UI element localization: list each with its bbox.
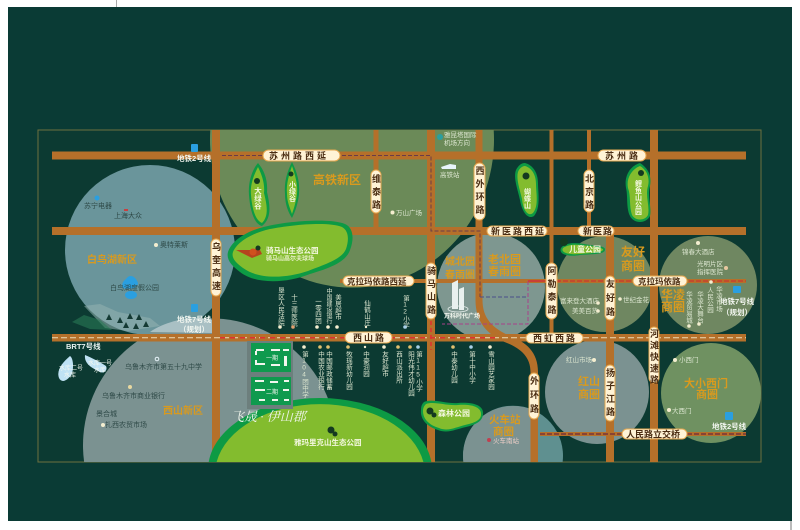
metro icon: 地铁2号线 north: 地铁2号线 bbox=[177, 153, 212, 163]
points of interest: east districts bbox=[487, 241, 728, 445]
lakes: BRT lake right: 水库一号 bbox=[88, 359, 112, 367]
name: 城北商圈 right: 老北园 bbox=[488, 252, 521, 266]
poi: 中国农业银行: 中国农业银行 bbox=[316, 350, 325, 391]
metro icon: 地铁7号线 east: 地铁7号线 bbox=[720, 296, 755, 306]
poi: 中国邮政储蓄: 中国邮政储蓄 bbox=[324, 350, 333, 391]
metro icon: 地铁7号线 west bbox=[177, 304, 212, 334]
poi: 光明路医院 bbox=[697, 259, 728, 276]
lakes: BRT lake left: 水库二号 bbox=[59, 364, 83, 372]
poi: 华凌贸易城: 华凌贸易城 bbox=[684, 290, 693, 325]
project block: 二期: 二期 bbox=[266, 388, 278, 396]
poi: 垦区人民法院: 垦区人民法院 bbox=[276, 287, 285, 327]
poi: 中泰幼儿园 bbox=[450, 345, 458, 385]
poi: 第115小学: 第115小学 bbox=[414, 350, 423, 392]
green park: 森林公园 bbox=[421, 401, 483, 432]
road label: 克拉玛依路: 克拉玛依路 bbox=[638, 276, 681, 286]
road label pills bbox=[211, 150, 687, 440]
project block: 一期: 一期 bbox=[266, 354, 278, 362]
name: 华凌商圈 bbox=[661, 287, 685, 314]
poi: 一零四团: 一零四团 bbox=[314, 298, 322, 325]
points of interest: along 西山路 north bbox=[276, 287, 410, 329]
green park: 蝴蝶山 bbox=[515, 163, 539, 217]
road label: 苏州路西延: 苏州路西延 bbox=[269, 150, 329, 161]
green park: 雅玛里克山生态公园 bbox=[209, 398, 431, 462]
poi: 锦春大酒店: 锦春大酒店 bbox=[682, 247, 715, 256]
road label: 西外环路: 西外环路 bbox=[474, 166, 484, 218]
poi group: 白鸟湖新区: 苏宁电器 bbox=[84, 201, 112, 210]
green park: 儿童公园 bbox=[560, 238, 605, 256]
poi: 世纪金花 bbox=[618, 295, 650, 304]
name: 高铁新区: 高铁新区 bbox=[313, 172, 361, 187]
poi group: 高铁新区: 高铁站 bbox=[440, 170, 460, 179]
green park: 鲤鱼山公园 bbox=[626, 163, 651, 222]
road label: 苏州路: 苏州路 bbox=[605, 150, 641, 161]
poi group: 高铁新区 bbox=[390, 130, 477, 217]
green park: 雅玛里克山生态公园: 雅玛里克山生态公园 bbox=[294, 437, 362, 447]
poi: 光明路医院: 光明片区 bbox=[697, 259, 724, 268]
metro icon: 地铁2号线 southeast: 地铁2号线 bbox=[712, 421, 747, 431]
poi: 友好超市 bbox=[380, 345, 389, 378]
road label: 维泰路: 维泰路 bbox=[371, 173, 381, 213]
poi group: 白鸟湖新区: 奥特莱斯 bbox=[160, 240, 188, 249]
road label: 骑马山路: 骑马山路 bbox=[426, 265, 436, 318]
metro icon: 地铁7号线 east bbox=[720, 286, 755, 317]
poi: 大西门: 大西门 bbox=[672, 406, 692, 415]
lakes: BRT lake right bbox=[85, 355, 112, 374]
metro icon: 地铁7号线 east: （规划） bbox=[722, 307, 752, 317]
poi: 西山派出所: 西山派出所 bbox=[394, 351, 403, 385]
poi: 世纪金花: 世纪金花 bbox=[623, 295, 650, 304]
area: 高铁新区 bbox=[210, 130, 494, 288]
green park: 鲤鱼山公园: 鲤鱼山公园 bbox=[634, 179, 642, 216]
poi: 中豪润园: 中豪润园 bbox=[362, 350, 370, 378]
lakes: BRT lake left bbox=[58, 356, 83, 381]
name: 城北商圈 right: 春雨圈 bbox=[488, 264, 521, 278]
green park: 小绿谷: 小绿谷 bbox=[288, 180, 296, 203]
poi: 牧瑶新幼儿园: 牧瑶新幼儿园 bbox=[344, 350, 353, 391]
road label: 外环路: 外环路 bbox=[529, 375, 539, 418]
name: 城北商圈 left: 城北园 bbox=[445, 255, 475, 268]
poi: 小西门: 小西门 bbox=[679, 355, 698, 364]
poi: 仙鹤山庄: 仙鹤山庄 bbox=[362, 299, 371, 327]
name: 华凌商圈: 华凌 bbox=[661, 287, 685, 302]
name: 红山商圈 bbox=[578, 374, 600, 401]
dashed routes bbox=[52, 156, 746, 434]
name: 城北商圈 left: 春雨圈 bbox=[445, 268, 475, 281]
road label: 阿勒泰路: 阿勒泰路 bbox=[546, 266, 556, 318]
poi: 第五十九中学: 乌鲁木齐市第五十九中学 bbox=[125, 362, 202, 371]
road label: 扬子江路: 扬子江路 bbox=[605, 367, 615, 420]
green park: 骑马山生态公园 bbox=[228, 221, 353, 281]
lakes: BRT lake right: 水库 bbox=[94, 366, 106, 374]
poi: 农贸市场: 扎西农贸市场 bbox=[105, 420, 147, 429]
BRT label: BRT7号线 bbox=[66, 341, 101, 351]
poi: 红山市场 bbox=[566, 355, 596, 364]
poi: 西山派出所 bbox=[394, 345, 403, 385]
points of interest: along 西山路 south bbox=[300, 345, 495, 398]
poi: 美居大酒店: 富来登大酒店 bbox=[560, 296, 600, 305]
district areas bbox=[65, 130, 761, 462]
poi: 火车南站 bbox=[487, 436, 520, 445]
road label: 河滩快速路: 河滩快速路 bbox=[649, 328, 659, 386]
forest and hills decoration bbox=[72, 304, 212, 333]
road label: 北京路: 北京路 bbox=[584, 173, 594, 213]
road label: 克拉玛依路西延: 克拉玛依路西延 bbox=[347, 276, 407, 286]
landmark: 万达广场 tower: 万科时代广场 bbox=[444, 312, 480, 320]
area: 火车站商圈 bbox=[463, 406, 563, 462]
project name: 飞晟 · 伊山郡 bbox=[231, 409, 308, 424]
poi: 红山市场: 红山市场 bbox=[566, 355, 592, 364]
area: 红山商圈 bbox=[545, 340, 649, 444]
area: 城北商圈 bbox=[437, 233, 545, 341]
green park: 小绿谷 bbox=[285, 162, 299, 218]
poi: 锦春大酒店 bbox=[682, 241, 715, 256]
metro icon: 地铁7号线 west: （规划） bbox=[179, 324, 209, 334]
poi: 第12小学: 第12小学 bbox=[402, 294, 410, 329]
poi: 中泰幼儿园: 中泰幼儿园 bbox=[450, 350, 458, 385]
green park: 蝴蝶山: 蝴蝶山 bbox=[524, 187, 531, 210]
name: 大小西门商圈 bbox=[684, 376, 728, 401]
poi: 华凌市场: 华凌市场 bbox=[714, 285, 723, 313]
name: 友好商圈: 商圈 bbox=[621, 258, 645, 273]
green park: 大绿谷: 大绿谷 bbox=[253, 186, 262, 211]
green park: 大绿谷 bbox=[249, 163, 269, 226]
name: 火车站商圈: 火车站 bbox=[489, 413, 521, 426]
name: 城北商圈 right bbox=[488, 252, 521, 278]
green park: 骑马山生态公园: 骑马山生态公园 bbox=[266, 245, 318, 255]
area: 大小西门商圈 bbox=[661, 343, 761, 443]
green park: 森林公园: 森林公园 bbox=[438, 408, 470, 418]
metro icon: 地铁2号线 north bbox=[177, 144, 212, 163]
poi: 阳光伟才幼儿园: 阳光伟才幼儿园 bbox=[406, 350, 415, 398]
name: 大小西门商圈: 大小西门 bbox=[684, 376, 728, 390]
name: 友好商圈: 友好 bbox=[621, 244, 645, 259]
poi group: 高铁新区: 机场方向 bbox=[444, 138, 470, 147]
roads bbox=[52, 130, 746, 462]
lake: 白鸟湖 bbox=[122, 276, 138, 299]
poi: 中豪润园 bbox=[362, 346, 370, 378]
poi: 第十中小学: 第十中小学 bbox=[468, 350, 476, 384]
road label: 乌奎高速: 乌奎高速 bbox=[211, 241, 221, 294]
poi: 第104团中学: 第104团中学 bbox=[300, 350, 309, 398]
poi: 美美百货: 美美百货 bbox=[572, 306, 598, 315]
poi: 景合城: 景合城 bbox=[96, 409, 117, 418]
poi: 商业银行: 乌鲁木齐市商业银行 bbox=[102, 391, 165, 400]
name: 红山商圈: 商圈 bbox=[578, 387, 600, 401]
lakes: BRT lake left: 水库 bbox=[64, 371, 76, 379]
area: 西山新区 bbox=[83, 318, 337, 462]
name: 火车站商圈: 商圈 bbox=[493, 425, 514, 438]
poi group: 高铁新区: 万山广场 bbox=[396, 208, 422, 217]
name: 火车站商圈 bbox=[489, 413, 521, 438]
road label: 新医路: 新医路 bbox=[583, 226, 613, 236]
map frame bbox=[38, 130, 761, 462]
project site: 飞晟·伊山郡 bbox=[231, 341, 308, 424]
poi: 光明路医院: 指挥医院 bbox=[697, 267, 724, 276]
green park: 儿童公园: 儿童公园 bbox=[569, 244, 601, 254]
poi: 美居超市: 美居超市 bbox=[334, 293, 342, 321]
poi group: 白鸟湖新区: 白鸟湖度假公园 bbox=[110, 283, 159, 292]
name: 西山新区: 西山新区 bbox=[163, 404, 203, 417]
metro icon: 地铁2号线 southeast bbox=[712, 412, 747, 431]
road label: 人民路立交桥: 人民路立交桥 bbox=[626, 428, 680, 440]
poi group: 高铁新区: 雅昆塔国际 bbox=[444, 130, 477, 139]
name: 友好商圈 bbox=[621, 244, 645, 273]
road label: 西虹西路: 西虹西路 bbox=[533, 332, 577, 344]
area: 白鸟湖新区 bbox=[65, 165, 235, 335]
road label: 友好路: 友好路 bbox=[605, 278, 615, 321]
green park: 骑马山生态公园: 骑马山高尔夫球场 bbox=[266, 254, 314, 262]
name: 红山商圈: 红山 bbox=[578, 374, 600, 388]
landmark: 万达广场 tower bbox=[444, 280, 480, 320]
poi group: 白鸟湖新区: 上海大众 bbox=[114, 211, 142, 220]
poi: 人民公园 bbox=[706, 280, 714, 314]
poi: 火车南站: 火车南站 bbox=[493, 436, 520, 445]
points of interest: 西山新区 bbox=[96, 357, 202, 429]
road label: 西山路: 西山路 bbox=[353, 332, 386, 343]
poi: 华凌大舞台: 华凌大舞台 bbox=[696, 290, 704, 325]
road label: 西山路 bbox=[345, 332, 392, 343]
poi: 友好超市: 友好超市 bbox=[380, 350, 389, 378]
poi: 小西门 bbox=[673, 355, 698, 364]
name: 大小西门商圈: 商圈 bbox=[696, 387, 718, 401]
poi: 雪山园艺家园: 雪山园艺家园 bbox=[486, 351, 495, 391]
area: 友好商圈 bbox=[557, 236, 653, 332]
road label: 苏州路 bbox=[598, 150, 646, 161]
poi: 中国建设银行: 中国建设银行 bbox=[325, 287, 332, 325]
poi group: 白鸟湖新区 bbox=[84, 196, 188, 292]
name: 城北商圈 left bbox=[445, 255, 475, 281]
name: 华凌商圈: 商圈 bbox=[661, 299, 685, 314]
points of interest: north-west areas bbox=[84, 130, 477, 292]
name: 白鸟湖新区: 白鸟湖新区 bbox=[87, 253, 137, 266]
metro icon: 地铁7号线 west: 地铁7号线 bbox=[177, 314, 212, 324]
area: 华凌商圈 bbox=[659, 236, 757, 334]
poi: 十三师医院: 十三师医院 bbox=[290, 293, 298, 328]
district names bbox=[87, 172, 728, 438]
road label: 新医路西延: 新医路西延 bbox=[491, 226, 546, 236]
poi: 人民公园: 人民公园 bbox=[706, 287, 714, 314]
poi: 大西门 bbox=[667, 406, 692, 415]
